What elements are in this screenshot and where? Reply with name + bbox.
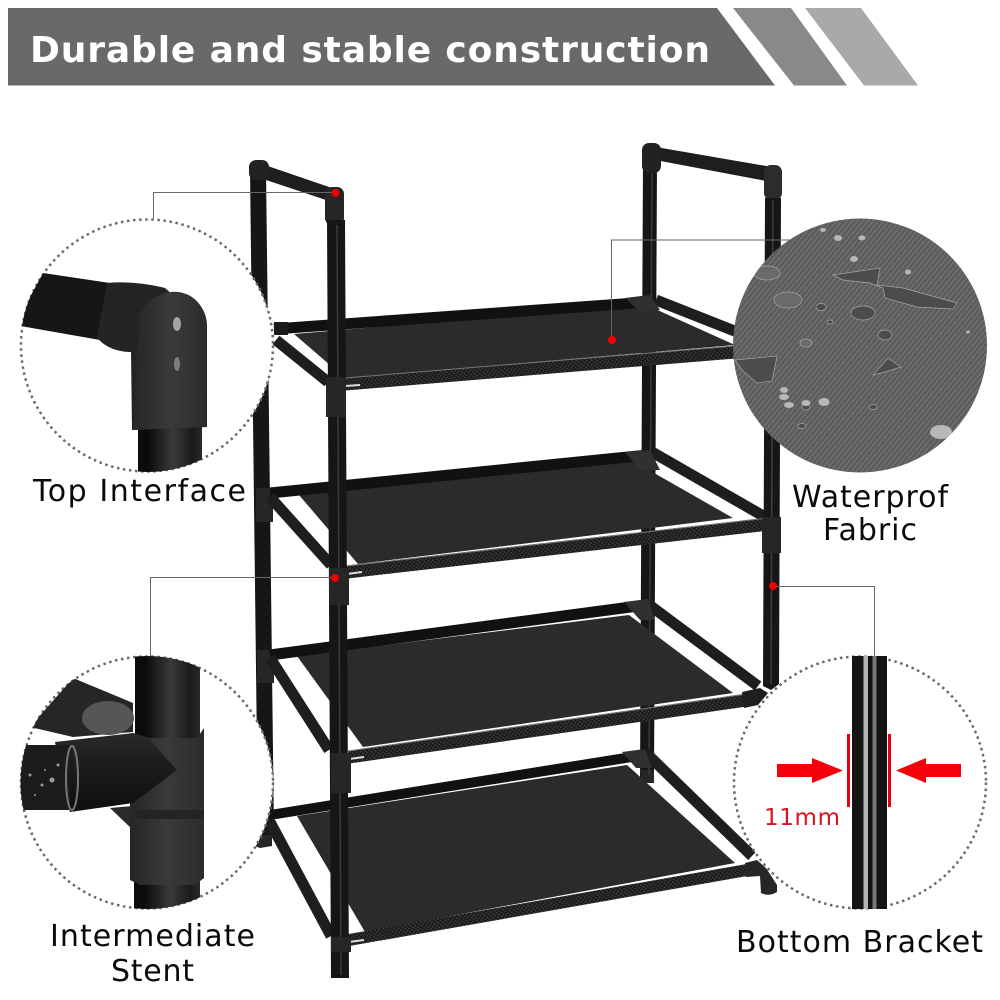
- label: waterproof fabric: [792, 480, 949, 548]
- label: intermediate stent: [50, 919, 255, 989]
- label: waterproof fabric: Fabric: [823, 513, 917, 548]
- elbow joint photo: [15, 273, 207, 480]
- header banner: [8, 8, 918, 86]
- title: Durable and stable construction: [30, 30, 710, 71]
- corner foot: [745, 860, 777, 895]
- shelf rack: [249, 143, 782, 978]
- tube close-up: [852, 656, 887, 909]
- callout: bottom bracket: [734, 656, 986, 909]
- label: waterproof fabric: Waterprof: [792, 480, 949, 515]
- red marker dots: [331, 189, 777, 590]
- label: bottom bracket: Bottom Bracket: [736, 925, 983, 960]
- arrow: left: [777, 758, 843, 783]
- handles: [249, 143, 782, 225]
- water droplets: [735, 266, 957, 428]
- arrow: right: [896, 758, 961, 783]
- label: intermediate stent: Intermediate: [50, 919, 255, 954]
- label: top interface: Top Interface: [32, 474, 246, 509]
- callout: waterproof fabric: [733, 218, 987, 472]
- T connector photo: [15, 650, 204, 914]
- callout: intermediate stent: [15, 650, 273, 914]
- callout: top interface: [15, 220, 273, 480]
- back posts: [250, 160, 657, 848]
- front posts: [326, 198, 781, 978]
- shelf 2: [270, 450, 780, 574]
- shelf 4: [270, 749, 777, 942]
- dimension bars: [847, 734, 891, 807]
- dimension label: 11mm: [764, 805, 840, 831]
- shelf 3: [270, 599, 768, 759]
- label: intermediate stent: Stent: [111, 954, 194, 989]
- leader lines: [150, 192, 874, 656]
- shelf 1: [274, 295, 772, 386]
